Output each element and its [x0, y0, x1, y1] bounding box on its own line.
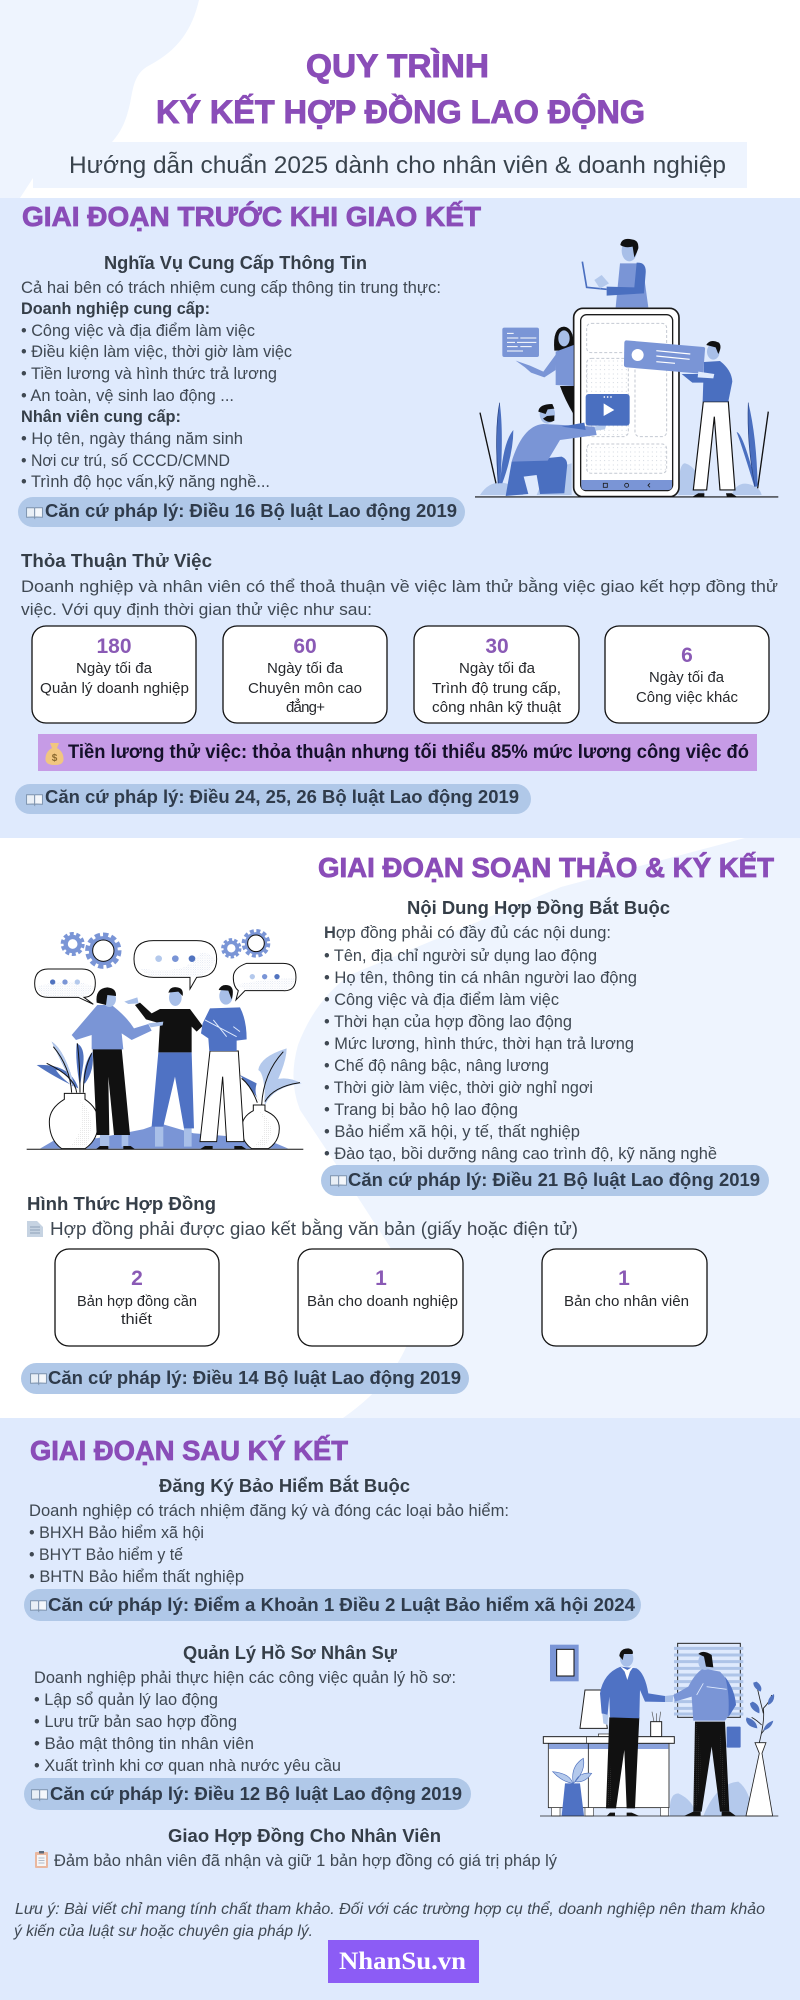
logo: NhanSu.vn: NhanSu.vn [339, 1948, 466, 1975]
subheading: nghĩa vụ: Nghĩa Vụ Cung Cấp Thông Tin [104, 253, 367, 273]
legal pill: điều 24 25 26: Căn cứ pháp lý: Điều 24, 25, 26 Bộ luật Lao động 2019 [45, 786, 519, 807]
text block: obligations: Doanh nghiệp cung cấp: [21, 300, 210, 318]
illustration: three people talking [27, 931, 303, 1149]
card: 180 days: Quản lý doanh nghiệp [40, 680, 189, 697]
card: 180 days: Ngày tối đa [76, 660, 153, 677]
text block: contract contents: • Chế độ nâng bậc, nâng lương [324, 1057, 549, 1075]
text block: obligations: • Trình độ học vấn,kỹ năng nghề... [21, 473, 270, 491]
legal pill: điều 14 [21, 1363, 469, 1394]
text block: obligations: • Tiền lương và hình thức trả lương [21, 365, 277, 383]
card: 1 copy employer: 1 [375, 1267, 387, 1290]
text block: obligations: • An toàn, vệ sinh lao động ... [21, 387, 234, 405]
card: 30 days [414, 626, 579, 723]
text block: obligations: • Nơi cư trú, số CCCD/CMND [21, 452, 230, 470]
subheading: đăng ký bảo hiểm: Đăng Ký Bảo Hiểm Bắt Buộc [159, 1475, 410, 1496]
legal pill: điều 24 25 26 [15, 784, 531, 814]
legal pill: bảo hiểm xã hội: Căn cứ pháp lý: Điểm a Khoản 1 Điều 2 Luật Bảo hiểm xã hội 2024 [48, 1594, 636, 1615]
card: 180 days [32, 626, 196, 723]
panel: giai đoạn trước khi giao kết [0, 198, 800, 838]
card: 60 days: Ngày tối đa [267, 660, 344, 677]
card: 60 days: đẳng+ [286, 698, 325, 716]
panel: giai đoạn sau ký kết [0, 1418, 800, 2000]
subheading: hình thức: Hình Thức Hợp Đồng [27, 1194, 216, 1214]
card: 180 days: 180 [96, 635, 132, 658]
callout: probation salary: Tiền lương thử việc: thỏa thuận nhưng tối thiểu 85% mức lương công việc đó [68, 742, 749, 763]
section heading: GIAI ĐOẠN TRƯỚC KHI GIAO KẾT [22, 201, 481, 232]
text block: probation intro [21, 577, 778, 619]
title line 2: KÝ KẾT HỢP ĐỒNG LAO ĐỘNG [156, 94, 645, 130]
text block: contract contents: • Đào tạo, bồi dưỡng nâng cao trình độ, kỹ năng nghề [324, 1145, 717, 1163]
text block: contract contents: • Thời giờ làm việc, thời giờ nghỉ ngơi [324, 1079, 593, 1097]
panel: header [33, 48, 747, 188]
subheading: nội dung: Nội Dung Hợp Đồng Bắt Buộc [407, 897, 670, 918]
text block: contract contents: • Tên, địa chỉ người sử dụng lao động [324, 947, 597, 965]
subtitle band: Hướng dẫn chuẩn 2025 dành cho nhân viên & doanh nghiệp [69, 152, 726, 179]
icon: document [27, 1221, 43, 1237]
text block: contract contents: • Trang bị bảo hộ lao động [324, 1101, 518, 1119]
subheading: thỏa thuận thử việc: Thỏa Thuận Thử Việc [21, 551, 212, 571]
legal pill: điều 21: Căn cứ pháp lý: Điều 21 Bộ luật Lao động 2019 [348, 1169, 760, 1190]
card: 2 copies: 2 [131, 1267, 143, 1290]
card: 30 days: 30 [485, 635, 509, 658]
text block: records: • Lưu trữ bản sao hợp đồng [34, 1713, 237, 1731]
card: 30 days: Ngày tối đa [459, 660, 536, 677]
card: 30 days: công nhân kỹ thuật [432, 699, 562, 716]
card: 2 copies: thiết [121, 1311, 153, 1328]
card: 1 copy employee [542, 1249, 707, 1346]
text block: obligations: • Điều kiện làm việc, thời giờ làm việc [21, 343, 292, 361]
text block: records: • Lập sổ quản lý lao động [34, 1691, 218, 1709]
text block: insurance: • BHXH Bảo hiểm xã hội [29, 1524, 204, 1542]
text block: delivery: Đảm bảo nhân viên đã nhận và giữ 1 bản hợp đồng có giá trị pháp lý [54, 1852, 558, 1870]
legal pill: điều 14: Căn cứ pháp lý: Điều 14 Bộ luật Lao động 2019 [48, 1367, 461, 1388]
text block: contract contents: • Mức lương, hình thức, thời hạn trả lương [324, 1035, 634, 1053]
illustration: handshake at office [540, 1643, 778, 1816]
card: 1 copy employer: Bản cho doanh nghiệp [307, 1293, 458, 1310]
card: 6 days: Công việc khác [636, 689, 738, 706]
subheading: quản lý hồ sơ: Quản Lý Hồ Sơ Nhân Sự [183, 1643, 398, 1663]
card: 6 days [605, 626, 769, 723]
background blob: top left [0, 0, 199, 198]
text block: contract contents: • Bảo hiểm xã hội, y tế, thất nghiệp [324, 1123, 580, 1141]
icon: money bag [45, 743, 64, 765]
text block: contract contents: • Thời hạn của hợp đồng lao động [324, 1013, 572, 1031]
card: 1 copy employee: 1 [618, 1267, 630, 1290]
legal pill: điều 21 [321, 1165, 769, 1196]
text block: insurance [29, 1502, 509, 1586]
text block: obligations: • Công việc và địa điểm làm việc [21, 322, 255, 340]
card: 30 days: Trình độ trung cấp, [432, 680, 561, 697]
text block: probation intro: việc. Với quy định thời gian thử việc như sau: [21, 601, 372, 619]
text block: records [34, 1669, 456, 1775]
card: 60 days: 60 [293, 635, 317, 658]
legal pill: điều 16 [18, 497, 465, 527]
text block: contract contents: • Họ tên, thông tin cá nhân người lao động [324, 969, 637, 987]
icon: clipboard [35, 1851, 48, 1868]
card: 1 copy employee: Bản cho nhân viên [564, 1293, 689, 1310]
logo: NhanSu.vn [328, 1940, 479, 1983]
text block: records: Doanh nghiệp phải thực hiện các công việc quản lý hồ sơ: [34, 1669, 456, 1687]
panel: giai đoạn soạn thảo & ký kết [0, 838, 800, 1418]
card: 1 copy employer [298, 1249, 463, 1346]
legal pill: điều 16: Căn cứ pháp lý: Điều 16 Bộ luật Lao động 2019 [45, 500, 457, 521]
note: Lưu ý: Bài viết chỉ mang tính chất tham khảo. Đối với các trường hợp cụ thể, doanh nghiệp nên tham khảo [15, 1900, 765, 1918]
text block: insurance: Doanh nghiệp có trách nhiệm đăng ký và đóng các loại bảo hiểm: [29, 1502, 509, 1520]
text block: contract contents: Hợp đồng phải có đầy đủ các nội dung: [324, 924, 611, 942]
text block: contract contents [324, 924, 717, 1163]
icon: money bag: $ [52, 753, 58, 764]
card: 60 days [223, 626, 387, 723]
text block: obligations: Cả hai bên có trách nhiệm cung cấp thông tin trung thực: [21, 279, 441, 297]
note: ý kiến của luật sư hoặc chuyên gia pháp lý. [13, 1923, 313, 1940]
text block: probation intro: Doanh nghiệp và nhân viên có thể thoả thuận về việc làm thử bằng việc giao kết hợp đồng thử [21, 577, 778, 596]
text block: records: • Xuất trình khi cơ quan nhà nước yêu cầu [34, 1757, 341, 1775]
callout: probation salary [38, 734, 757, 771]
text block: insurance: • BHYT Bảo hiểm y tế [29, 1546, 183, 1564]
section heading: GIAI ĐOẠN SOẠN THẢO & KÝ KẾT [318, 851, 774, 883]
subtitle band [33, 142, 747, 188]
card: 2 copies [55, 1249, 219, 1346]
illustration: people around phone [475, 239, 778, 497]
text block: obligations: Nhân viên cung cấp: [21, 408, 181, 426]
card: 2 copies: Bản hợp đồng cần [77, 1293, 197, 1310]
section heading: GIAI ĐOẠN SAU KÝ KẾT [30, 1435, 348, 1466]
legal pill: điều 12: Căn cứ pháp lý: Điều 12 Bộ luật Lao động 2019 [50, 1783, 462, 1804]
text block: written form: Hợp đồng phải được giao kết bằng văn bản (giấy hoặc điện tử) [50, 1218, 578, 1239]
subheading: giao hợp đồng: Giao Hợp Đồng Cho Nhân Viên [168, 1826, 441, 1846]
note [13, 1900, 765, 1940]
text block: insurance: • BHTN Bảo hiểm thất nghiệp [29, 1568, 244, 1586]
legal pill: bảo hiểm xã hội [24, 1589, 641, 1621]
text block: records: • Bảo mật thông tin nhân viên [34, 1735, 254, 1753]
card: 6 days: Ngày tối đa [649, 669, 725, 686]
text block: obligations [21, 279, 441, 491]
legal pill: điều 12 [24, 1778, 471, 1810]
text block: obligations: • Họ tên, ngày tháng năm sinh [21, 430, 243, 448]
text block: contract contents: • Công việc và địa điểm làm việc [324, 991, 559, 1009]
card: 6 days: 6 [681, 644, 693, 667]
card: 60 days: Chuyên môn cao [248, 680, 362, 697]
title line 1: QUY TRÌNH [306, 48, 489, 84]
